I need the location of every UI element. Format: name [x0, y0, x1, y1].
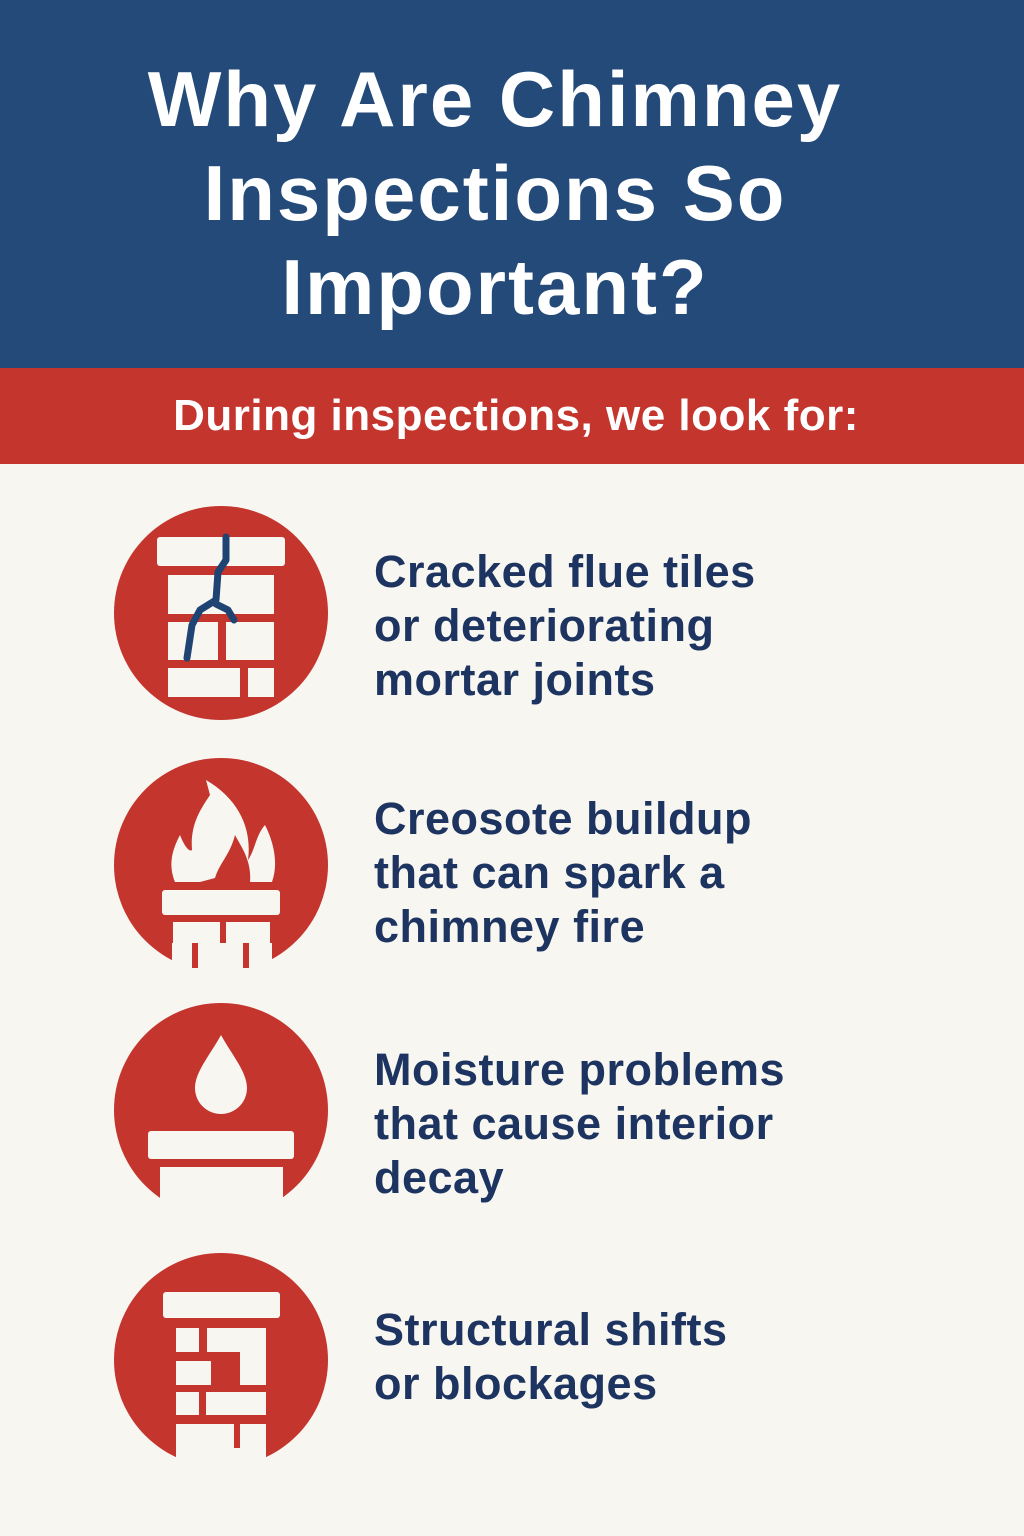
text: item 3: Moisture problems	[374, 1044, 785, 1095]
text: item 4: Structural shifts	[374, 1304, 728, 1355]
text: item 2	[374, 793, 752, 952]
text: item 4: or blockages	[374, 1358, 658, 1409]
text: item 1: mortar joints	[374, 654, 656, 705]
title: Inspections So	[204, 149, 786, 237]
text: item 2: chimney fire	[374, 901, 645, 952]
subtitle band: During inspections, we look for:	[173, 391, 859, 440]
text: item 2: Creosote buildup	[374, 793, 752, 844]
title: Important?	[281, 243, 709, 331]
text: item 2: that can spark a	[374, 847, 725, 898]
text: item 3	[374, 1044, 785, 1203]
text: item 4	[374, 1304, 728, 1409]
text: item 1: Cracked flue tiles	[374, 546, 756, 597]
icon: flame on chimney	[114, 758, 328, 968]
icon: water drop	[114, 1003, 328, 1198]
header	[0, 0, 1024, 368]
text: item 3: that cause interior	[374, 1098, 774, 1149]
subtitle band	[0, 368, 1024, 464]
text: item 1	[374, 546, 756, 705]
title: Why Are Chimney	[148, 55, 842, 143]
icon: shifted bricks	[114, 1253, 328, 1458]
icon: cracked bricks	[114, 506, 328, 720]
text: item 1: or deteriorating	[374, 600, 715, 651]
title	[148, 55, 842, 331]
text: item 3: decay	[374, 1152, 504, 1203]
